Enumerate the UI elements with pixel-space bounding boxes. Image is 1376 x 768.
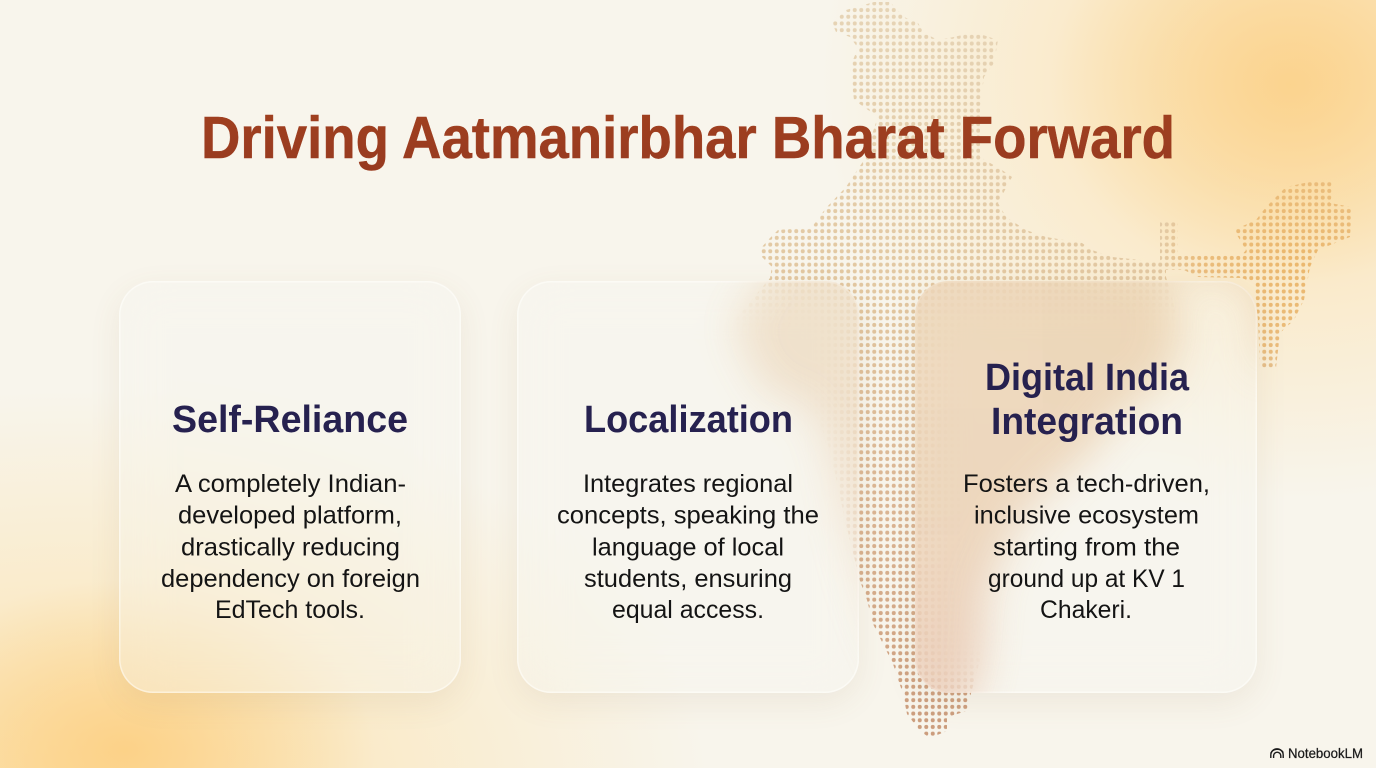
title: Driving Aatmanirbhar Bharat Forward bbox=[201, 105, 1175, 171]
body text: drastically reducing bbox=[181, 534, 400, 562]
body text: language of local bbox=[592, 534, 784, 562]
panel: localization bbox=[517, 281, 859, 693]
heading bbox=[985, 357, 1190, 443]
body text bbox=[161, 470, 420, 624]
body text: concepts, speaking the bbox=[557, 502, 819, 530]
body text: EdTech tools. bbox=[215, 596, 365, 624]
body text: students, ensuring bbox=[584, 565, 792, 593]
heading: Localization bbox=[584, 399, 793, 441]
body text bbox=[557, 470, 819, 624]
icon: notebook arcs bbox=[1271, 749, 1283, 758]
body text bbox=[963, 470, 1210, 624]
heading: Self-Reliance bbox=[172, 399, 408, 441]
body text: Chakeri. bbox=[1040, 596, 1132, 624]
panel: digital india integration bbox=[915, 281, 1257, 693]
brand name: NotebookLM bbox=[1288, 745, 1363, 761]
blurred map behind glass bbox=[915, 281, 1257, 693]
heading: Digital India bbox=[985, 357, 1190, 399]
body text: equal access. bbox=[612, 596, 764, 624]
body text: inclusive ecosystem bbox=[974, 502, 1199, 530]
body text: dependency on foreign bbox=[161, 565, 420, 593]
body text: starting from the bbox=[993, 534, 1180, 562]
dotted map of India bbox=[742, 2, 1351, 736]
body text: Fosters a tech-driven, bbox=[963, 470, 1210, 498]
card text bbox=[557, 399, 819, 624]
card text bbox=[161, 399, 420, 624]
heading: Integration bbox=[991, 401, 1183, 443]
body text: ground up at KV 1 bbox=[988, 565, 1185, 593]
body text: A completely Indian- bbox=[175, 470, 406, 498]
card text bbox=[963, 357, 1210, 624]
body text: developed platform, bbox=[178, 502, 402, 530]
body text: Integrates regional bbox=[583, 470, 793, 498]
panel: self-reliance bbox=[119, 281, 461, 693]
blurred map behind glass bbox=[734, 281, 859, 602]
